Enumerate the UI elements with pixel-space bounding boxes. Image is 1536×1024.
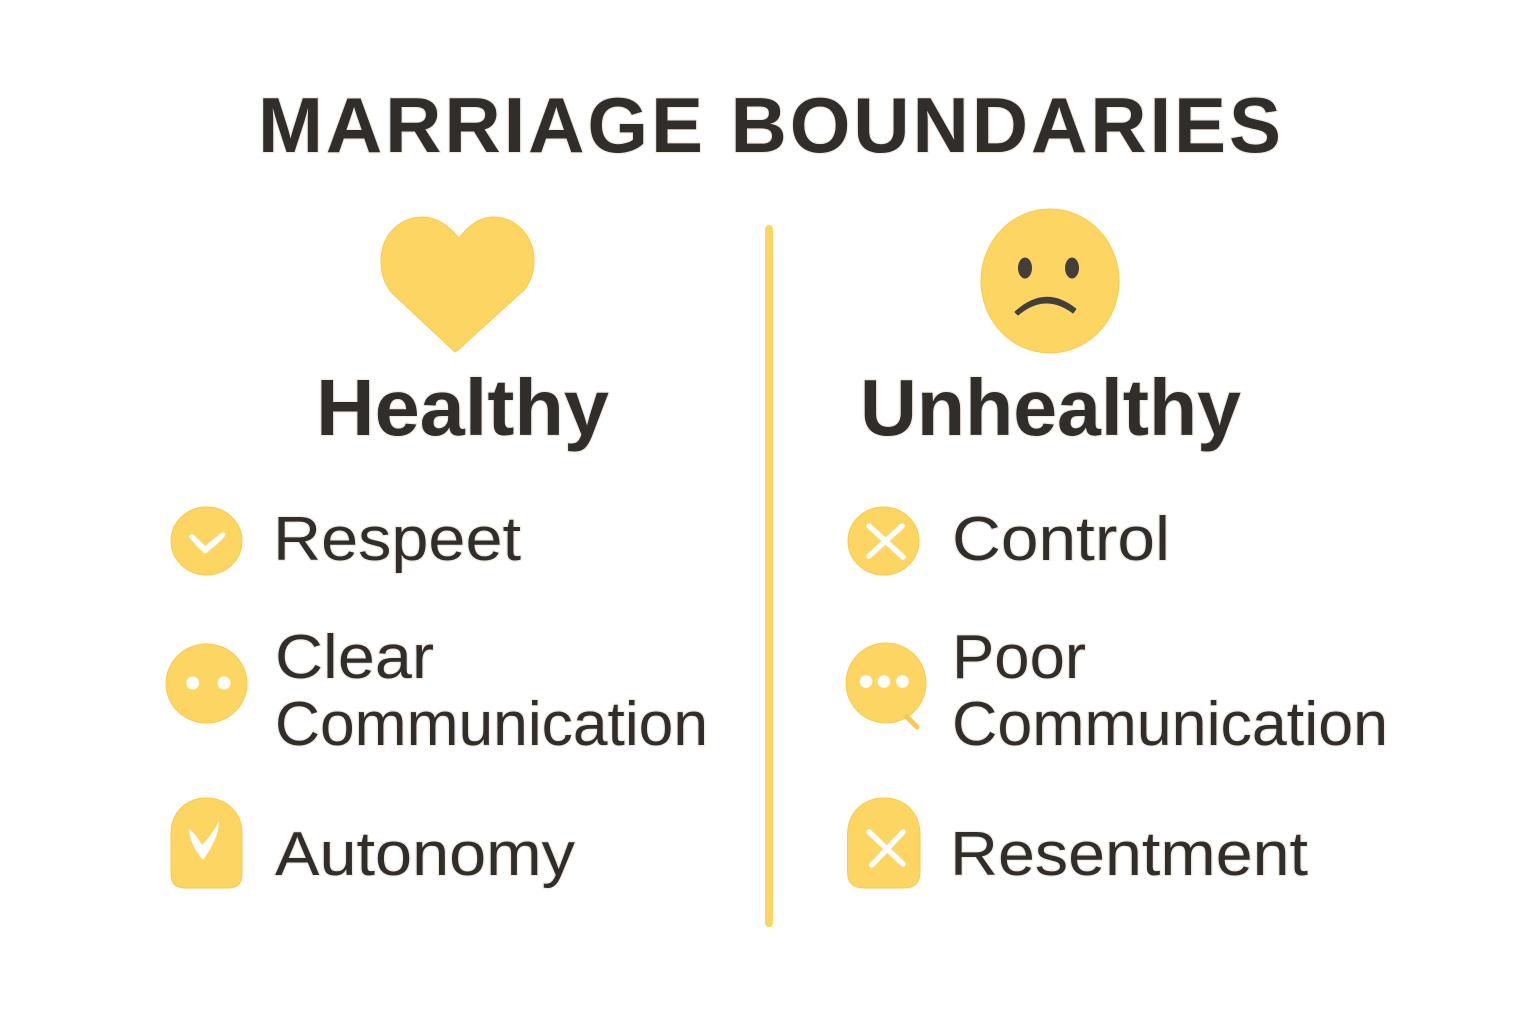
item: respect: Respeet bbox=[273, 505, 521, 574]
item: control bbox=[848, 505, 1170, 575]
item: autonomy bbox=[171, 798, 575, 889]
icon: heart bbox=[381, 217, 534, 352]
item: control: Control bbox=[952, 505, 1170, 574]
item: clear communication: Clear bbox=[275, 623, 434, 692]
panel: unhealthy bbox=[846, 209, 1388, 889]
center divider bbox=[765, 225, 773, 927]
heading: healthy: Healthy bbox=[316, 363, 610, 452]
icon: sad face bbox=[981, 209, 1119, 353]
item: resentment: Resentment bbox=[950, 820, 1308, 889]
item: resentment bbox=[848, 798, 1308, 889]
panel: healthy bbox=[166, 217, 708, 889]
item: poor communication: Poor bbox=[952, 623, 1086, 692]
item: poor communication bbox=[846, 623, 1388, 759]
heading: unhealthy: Unhealthy bbox=[860, 363, 1242, 452]
item: clear communication: Communication bbox=[275, 690, 708, 759]
item: autonomy: Autonomy bbox=[275, 820, 575, 889]
item: clear communication bbox=[166, 623, 708, 759]
title: MARRIAGE BOUNDARIES bbox=[258, 81, 1281, 169]
item: poor communication: Communication bbox=[952, 690, 1388, 759]
item: respect bbox=[171, 505, 521, 575]
